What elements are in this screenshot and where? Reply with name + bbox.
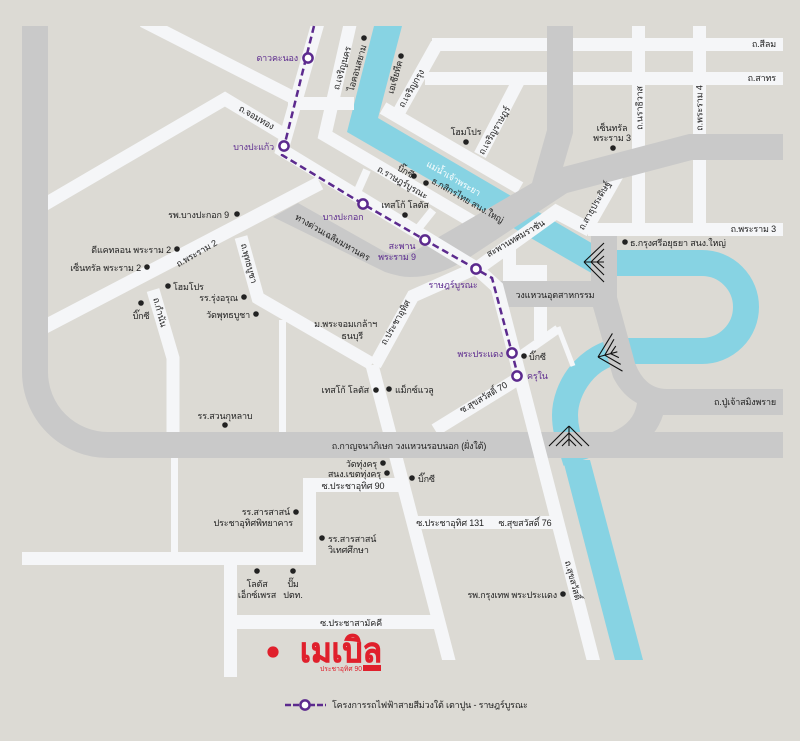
- road labels: ทางด่วนเฉลิมมหานคร: [293, 212, 372, 263]
- purple rail line: [279, 26, 522, 381]
- landmarks: ดีแคทลอน พระราม 2: [91, 245, 171, 255]
- landmarks: บิ๊กซี: [418, 472, 435, 484]
- road labels: ถ.พระราม 4: [694, 85, 704, 131]
- road labels: ถ.กำนัน: [151, 296, 169, 328]
- station labels: ราษฎร์บูรณะ: [428, 279, 478, 291]
- landmarks: แม็กซ์แวลู: [395, 383, 434, 396]
- icon: bridge symbol south: [549, 426, 589, 446]
- landmarks: ไอคอนสยาม: [345, 44, 369, 94]
- landmarks: ม.พระจอมเกล้าฯ: [314, 319, 377, 329]
- landmarks: ธ.กรุงศรีอยุธยา สนง.ใหญ่: [630, 238, 726, 249]
- road labels: ถ.ปู่เจ้าสมิงพราย: [714, 397, 776, 408]
- landmarks: ปตท.: [283, 590, 303, 600]
- landmarks: [70, 35, 726, 601]
- road labels: ถ.พระราม 2: [174, 238, 219, 269]
- road labels: ถ.สุขสวัสดิ์: [562, 559, 585, 603]
- legend: โครงการรถไฟฟ้าสายสีม่วงใต้ เตาปูน - ราษฎร์บูรณะ: [332, 699, 528, 711]
- project location marker: [267, 646, 279, 658]
- road labels: ซ.สุขสวัสดิ์ 76: [498, 516, 552, 529]
- icon: bridge symbol east: [584, 243, 604, 282]
- landmarks: วัดทุ่งครุ: [346, 459, 377, 470]
- landmarks: สนง.เขตทุ่งครุ: [328, 469, 381, 480]
- expressway and ring road: [35, 26, 783, 445]
- road labels: ถ.เจริญกรุง: [397, 68, 427, 110]
- station labels: บางปะแก้ว: [233, 142, 274, 152]
- landmarks: รร.สวนกุหลาบ: [198, 411, 253, 422]
- road: south branch: [224, 565, 237, 677]
- road labels: ถ.ประชาอุทิศ: [379, 298, 413, 347]
- landmarks: รพ.บางปะกอก 9: [168, 210, 229, 220]
- road labels: ถ.สาทร: [748, 73, 776, 83]
- road labels: ถ.กาญจนาภิเษก วงแหวนรอบนอก (ฝั่งใต้): [332, 439, 486, 451]
- station labels: พระราม 9: [378, 252, 416, 262]
- landmarks: โฮมโปร: [451, 127, 482, 137]
- landmarks: โลตัส: [246, 579, 268, 589]
- road labels: ซ.ประชาอุทิศ 90: [322, 481, 385, 492]
- road labels: ถ.นราธิวาส: [634, 85, 644, 130]
- road labels: ซ.ประชาอุทิศ 131: [416, 518, 484, 529]
- landmarks: เทสโก้ โลตัส: [381, 200, 429, 210]
- road labels: ซ.สุขสวัสดิ์ 70: [457, 378, 510, 416]
- road labels: ถ.สีลม: [752, 39, 776, 49]
- landmarks: บิ๊กซี: [396, 161, 416, 180]
- road labels: สะพานทศมราชัน: [485, 218, 546, 259]
- road labels: ถ.พระราม 3: [731, 224, 776, 234]
- landmarks: รพ.กรุงเทพ พระประแดง: [467, 590, 557, 601]
- station labels: สะพาน: [389, 241, 415, 251]
- landmarks: รร.สารสาสน์: [328, 533, 376, 544]
- landmarks: บิ๊กซี: [529, 350, 546, 362]
- main road with purple line: [282, 16, 601, 690]
- landmarks: เอ็กซ์เพรส: [238, 588, 277, 600]
- station labels: บางปะกอก: [323, 212, 363, 222]
- logo: Maple Prachauthit 90: ประชาอุทิศ 90: [320, 665, 362, 673]
- river: Chao Phraya: [347, 26, 746, 660]
- landmarks: พระราม 3: [593, 133, 631, 143]
- legend: [285, 699, 528, 711]
- landmarks: เซ็นทรัล พระราม 2: [70, 261, 141, 273]
- road labels: ถ.พุทธบูชา: [238, 242, 259, 285]
- landmarks: วัดพุทธบูชา: [206, 310, 250, 321]
- icon: bridge symbol middle: [593, 333, 622, 376]
- landmarks: โฮมโปร: [173, 282, 204, 292]
- station labels: [233, 53, 548, 382]
- landmarks: ปั๊ม: [287, 577, 299, 589]
- road labels: วงแหวนอุตสาหกรรม: [516, 290, 595, 301]
- landmarks: ธนบุรี: [341, 331, 363, 342]
- station labels: ครุใน: [527, 371, 548, 382]
- landmarks: ประชาอุทิศพิทยาคาร: [214, 518, 293, 529]
- landmarks: เซ็นทรัล: [597, 121, 627, 133]
- road labels: [151, 39, 776, 628]
- river label: แม่น้ำเจ้าพระยา: [425, 157, 483, 198]
- road labels: ซ.ประชาสามัคคี: [320, 618, 382, 628]
- landmarks: เทสโก้ โลตัส: [322, 385, 370, 395]
- road labels: ถ.จอมทอง: [237, 103, 276, 132]
- logo: Maple Prachauthit 90: เมเบิล: [300, 632, 382, 670]
- road labels: ถ.สาธุประดิษฐ์: [576, 179, 613, 232]
- station labels: ดาวคะนอง: [256, 53, 298, 63]
- landmarks: ธ.กสิกรไทย สนง.ใหญ่: [430, 176, 506, 225]
- landmarks: เอเชียทีค: [386, 59, 405, 95]
- landmarks: รร.สารสาสน์: [242, 506, 290, 517]
- road labels: ถ.เจริญนคร: [331, 45, 353, 91]
- road labels: ถ.เจริญราษฎร์: [476, 104, 512, 156]
- landmarks: รร.รุ่งอรุณ: [199, 293, 238, 304]
- station labels: พระประแดง: [457, 349, 503, 359]
- road labels: ถ.ราษฎร์บูรณะ: [375, 163, 430, 202]
- landmarks: บิ๊กซี: [133, 309, 150, 321]
- landmarks: วิเทศศึกษา: [328, 545, 369, 555]
